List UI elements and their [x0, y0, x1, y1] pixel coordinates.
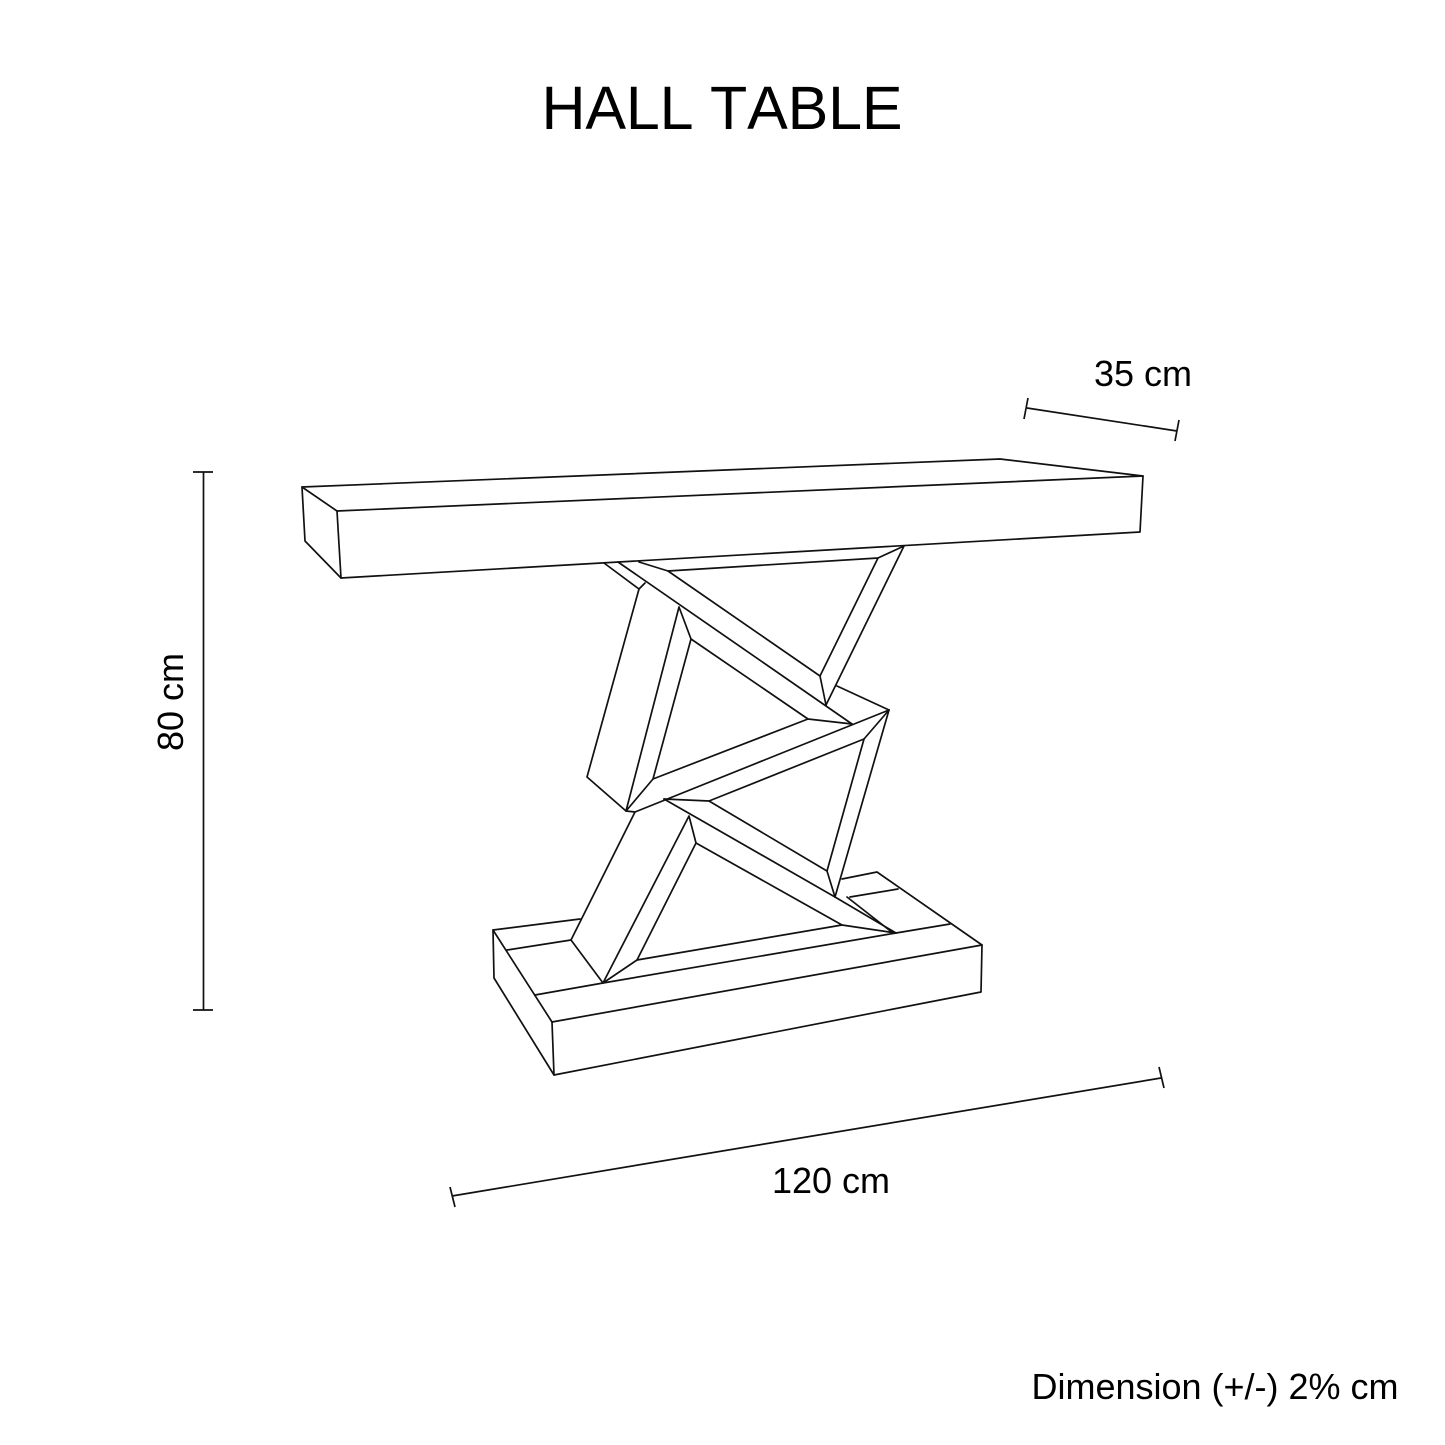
dimension: width 120 cm: 120 cm	[772, 1160, 890, 1201]
hall table line drawing	[302, 459, 1143, 1075]
tolerance note: Dimension (+/-) 2% cm	[1031, 1366, 1399, 1407]
base	[493, 872, 982, 1075]
dimension: depth 35 cm: 35 cm	[1094, 353, 1192, 394]
dimension: height 80 cm	[150, 472, 213, 1010]
lower frame	[571, 710, 896, 983]
middle frame	[587, 589, 889, 812]
dimension: height 80 cm: 80 cm	[150, 653, 191, 751]
upper frame	[604, 546, 904, 724]
dimension: width 120 cm	[450, 1067, 1164, 1207]
title: HALL TABLE	[542, 74, 902, 142]
table top	[302, 459, 1143, 578]
dimension: depth 35 cm	[1024, 353, 1192, 441]
